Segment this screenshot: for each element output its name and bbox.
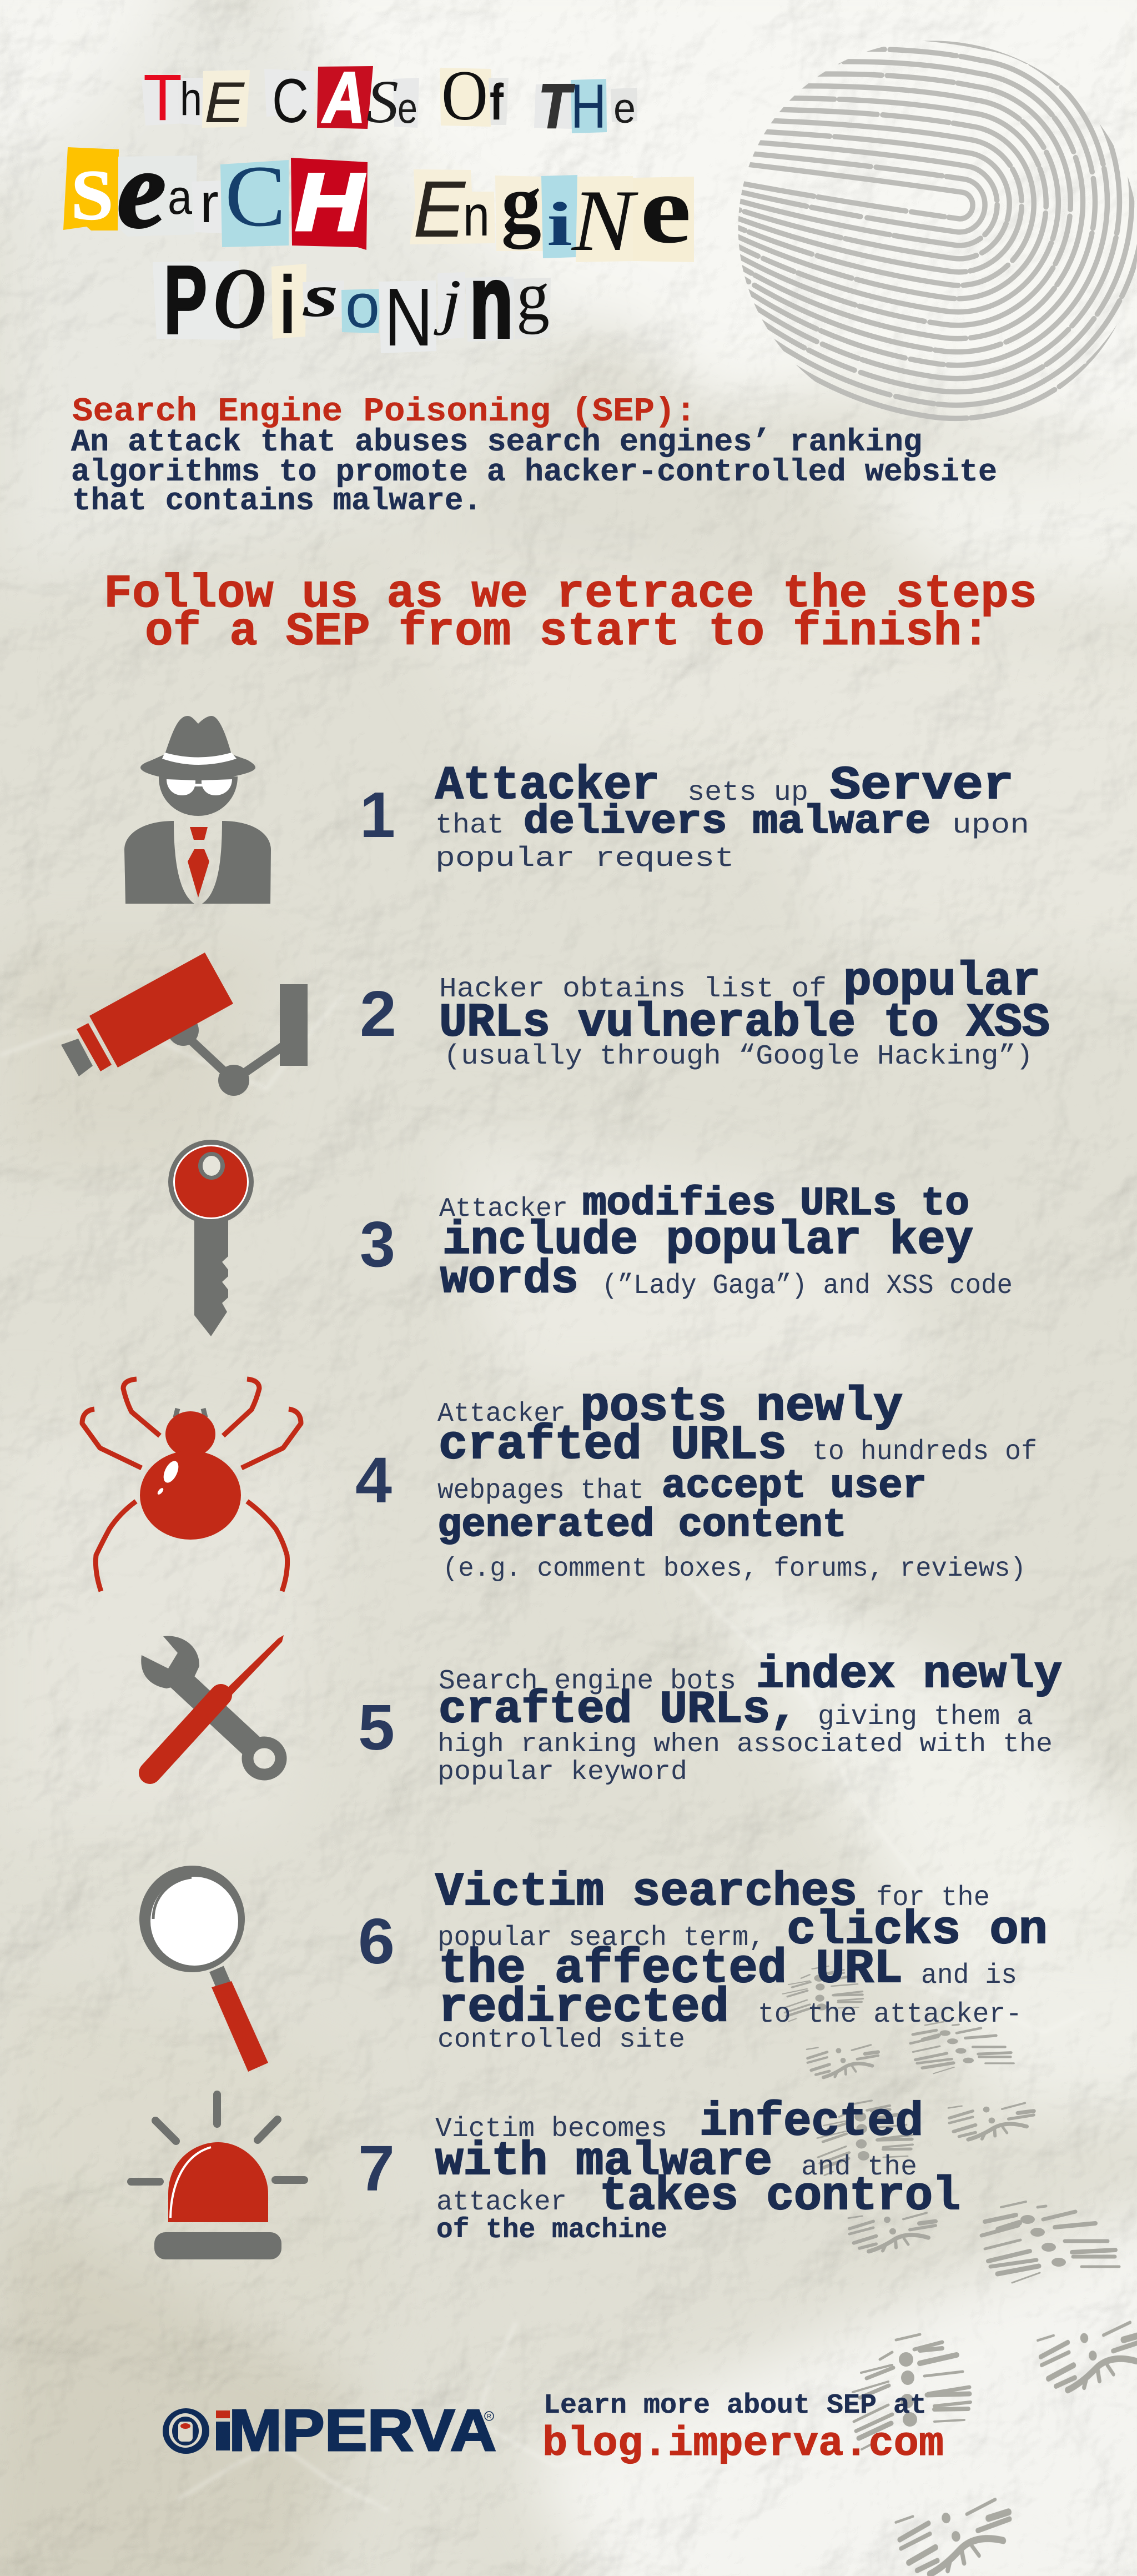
step 6 text [358, 1866, 1048, 2055]
title line 1: O [441, 56, 488, 135]
subheading: Follow us as we retrace the steps [104, 568, 1037, 621]
title line 2: C [225, 148, 286, 245]
step 7 text: attacker [436, 2187, 567, 2218]
SEP definition: algorithms to promote a hacker-controlled website [71, 455, 997, 490]
step 6 text: Victim searches [435, 1866, 857, 1919]
step 1 text [360, 760, 1029, 875]
step 1 text: upon [952, 810, 1029, 841]
step 2 text: 2 [360, 978, 396, 1050]
step 3 text: include popular key [442, 1215, 973, 1267]
learn more callout [542, 2390, 944, 2468]
title line 2: a [168, 169, 192, 224]
step 6 text: 6 [358, 1905, 395, 1977]
title line 2: n [463, 184, 490, 248]
title line 3: j [434, 267, 461, 336]
title line 1: e [398, 83, 417, 132]
title line 2: E [413, 164, 466, 254]
title line 3: n [470, 244, 513, 359]
step 6 text: to the attacker- [758, 1999, 1022, 2031]
Imperva logo: MPERVA [229, 2398, 496, 2463]
title line 2: g [501, 157, 541, 249]
step 3 text: words [440, 1254, 578, 1306]
icon: spy attacker [124, 716, 271, 904]
title line 1: A [322, 57, 365, 138]
title line 1: C [272, 66, 309, 136]
step 6 text: and is [921, 1960, 1017, 1992]
step 7 text: Victim becomes [435, 2113, 667, 2145]
step 4 text: webpages that [437, 1475, 644, 1507]
step 7 text: infected [700, 2096, 923, 2149]
title line 1: S [366, 68, 399, 136]
subheading: of a SEP from start to finish: [145, 606, 990, 659]
title line 3: P [164, 245, 207, 354]
fingerprint [738, 41, 1137, 421]
icon: key [168, 1140, 254, 1336]
step 5 text: Search engine bots [439, 1666, 736, 1697]
step 2 text: URLs vulnerable to XSS [439, 997, 1050, 1050]
learn more callout: blog.imperva.com [542, 2421, 944, 2468]
step 7 text: with malware [435, 2136, 772, 2188]
title line 2: e [117, 128, 166, 251]
SEP definition: Search Engine Poisoning (SEP): [72, 393, 696, 431]
step 3 text: modifies URLs to [582, 1182, 969, 1226]
step 2 text: Hacker obtains list of [439, 974, 827, 1005]
title line 1: T [539, 72, 575, 141]
step 1 text: popular request [435, 843, 734, 875]
title: The Case Of The Search Engine Poisoning [63, 56, 694, 363]
step 3 text: 3 [360, 1208, 395, 1280]
step 5 text: popular keyword [437, 1757, 687, 1787]
title line 1: h [180, 73, 202, 125]
step 4 text: generated content [437, 1503, 847, 1548]
step 7 text: and the [801, 2152, 917, 2183]
step 4 text: Attacker [437, 1399, 566, 1429]
step 5 text: 5 [358, 1691, 395, 1763]
step 1 text: sets up [687, 777, 808, 809]
title line 3: i [279, 259, 296, 351]
step 1 text: Attacker [435, 760, 660, 813]
title line 3: g [516, 258, 550, 335]
step 4 text [355, 1380, 1037, 1584]
step 7 text: takes control [600, 2171, 960, 2223]
step 2 text: (usually through “Google Hacking”) [444, 1041, 1033, 1073]
title line 1: T [143, 61, 182, 134]
step 2 text: popular [843, 956, 1040, 1009]
title line 3: N [384, 272, 433, 363]
step 6 text: clicks on [787, 1905, 1048, 1957]
step 4 text: 4 [355, 1444, 392, 1516]
title line 1: H [571, 72, 606, 141]
title line 2: N [571, 172, 638, 269]
step 1 text: delivers malware [524, 799, 930, 845]
icon: security camera [61, 953, 308, 1096]
icon: alarm siren [131, 2094, 304, 2259]
icon: wrench and screwdriver [141, 1635, 284, 1775]
icon: magnifying glass [139, 1866, 268, 2072]
step 4 text: to hundreds of [812, 1436, 1037, 1468]
SEP definition: An attack that abuses search engines’ ranking [71, 425, 922, 460]
title line 3: o [345, 271, 380, 340]
step 4 text: crafted URLs [439, 1418, 787, 1472]
step 1 text: Server [830, 760, 1014, 813]
SEP definition [71, 393, 997, 519]
step 7 text: 7 [358, 2132, 395, 2204]
Imperva logo: R [487, 2413, 491, 2420]
step 3 text [360, 1182, 1013, 1306]
title line 2: i [547, 190, 572, 259]
step 3 text: (”Lady Gaga”) and XSS code [602, 1270, 1013, 1302]
icon: red spider [82, 1379, 301, 1591]
step 5 text: crafted URLs, [439, 1684, 798, 1736]
step 1 text: that [435, 810, 504, 841]
title line 2 [63, 128, 694, 269]
step 6 text: for the [876, 1882, 990, 1914]
step 5 text [358, 1649, 1062, 1787]
learn more callout: Learn more about SEP at [544, 2390, 927, 2422]
step 6 text: controlled site [437, 2025, 685, 2055]
step 1 text: 1 [360, 779, 395, 851]
title line 1: E [204, 71, 245, 135]
step 6 text: popular search term, [437, 1922, 765, 1954]
title line 3: O [213, 250, 266, 347]
title line 3: s [303, 262, 339, 329]
title line 2: S [71, 156, 113, 234]
step 5 text: index newly [756, 1649, 1062, 1701]
step 4 text: posts newly [580, 1380, 903, 1434]
title line 2: e [640, 156, 691, 264]
step 6 text: redirected [439, 1981, 729, 2035]
step 5 text: giving them a [818, 1701, 1033, 1733]
title line 2: H [295, 157, 365, 247]
step 6 text: the affected URL [439, 1942, 903, 1996]
step 7 text [358, 2096, 960, 2246]
step 3 text: Attacker [439, 1194, 568, 1224]
title line 1 [142, 56, 637, 141]
title line 2: r [200, 172, 219, 234]
subheading [104, 568, 1037, 659]
step 4 text: accept user [662, 1465, 927, 1509]
footprints trail [783, 1966, 1137, 2576]
SEP definition: that contains malware. [72, 484, 482, 519]
title line 1: e [613, 85, 636, 132]
step 5 text: high ranking when associated with the [437, 1730, 1053, 1760]
step 2 text [360, 956, 1050, 1073]
step 4 text: (e.g. comment boxes, forums, reviews) [442, 1554, 1026, 1584]
step 7 text: of the machine [436, 2214, 667, 2246]
title line 3 [153, 244, 551, 363]
title line 1: f [490, 74, 504, 131]
